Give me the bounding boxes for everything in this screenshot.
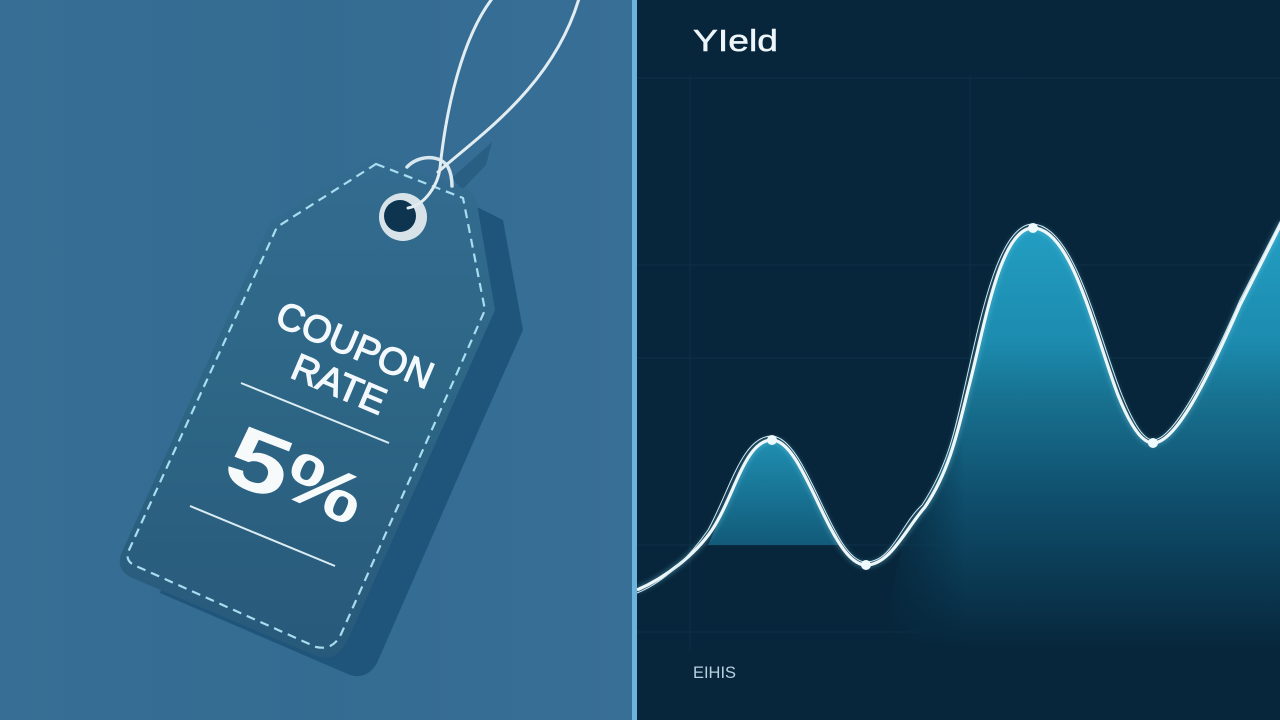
area fill: first peak: [708, 440, 838, 545]
value: 5%: 5: [213, 407, 306, 519]
label: coupon rate: RATE: [285, 346, 392, 424]
axis label: EIHIS: [693, 663, 736, 682]
value: 5%: %: [271, 437, 377, 541]
data points: [767, 223, 1158, 570]
eyelet: [379, 193, 427, 241]
curve thin echo: [637, 218, 1280, 593]
tag stitching: [128, 164, 485, 648]
area fill: second and third peaks: [902, 230, 1280, 626]
panel: yield chart background: [634, 0, 1280, 720]
lower divider: [190, 506, 335, 566]
heading: yield: YIeld: [693, 23, 778, 58]
label: coupon rate: COUPON: [270, 294, 440, 398]
panel: coupon rate background: [0, 0, 634, 720]
curve line: [637, 222, 1280, 590]
curve glow: [637, 222, 1280, 590]
cord shadow: [452, 142, 492, 190]
panel divider: [632, 0, 637, 720]
value: 5%: [213, 407, 377, 541]
cord: [407, 0, 580, 208]
area chart: yield curve: [637, 218, 1280, 650]
upper divider: [241, 383, 389, 443]
tag drop shadow: [160, 205, 523, 676]
tag body: [120, 155, 495, 658]
price tag: [120, 0, 580, 658]
